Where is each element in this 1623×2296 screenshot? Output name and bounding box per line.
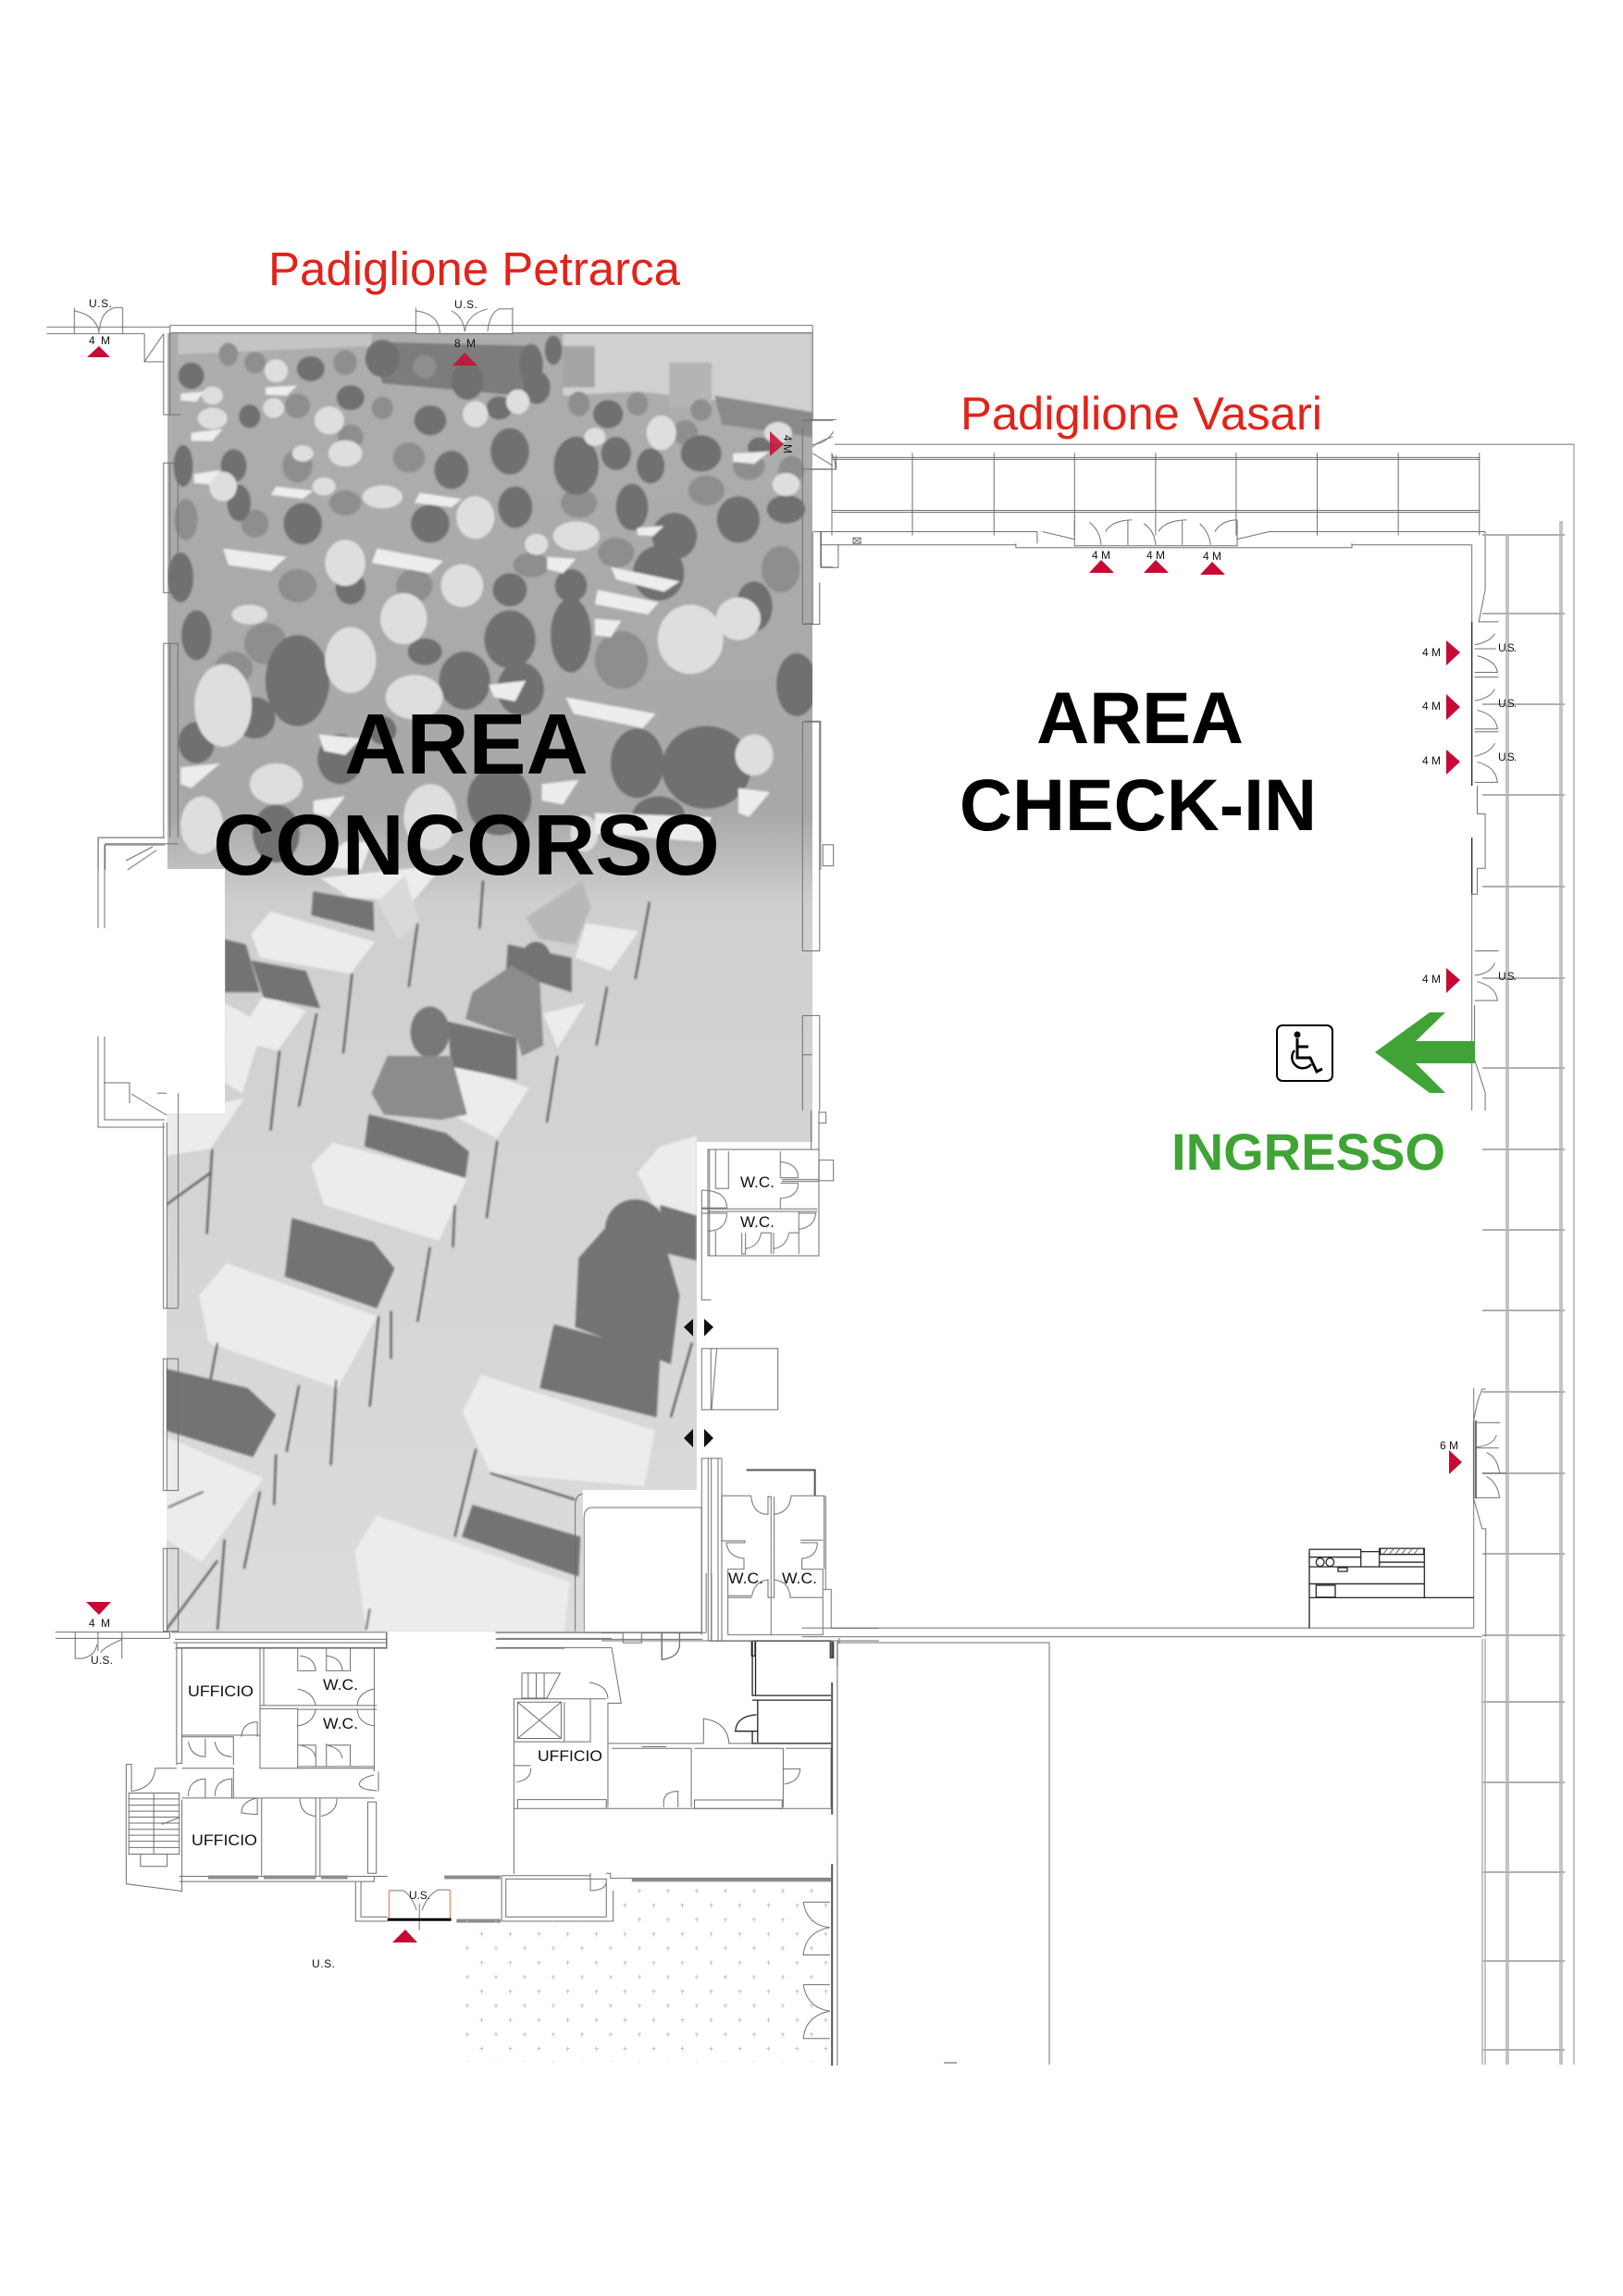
- room labels: [188, 1173, 817, 1849]
- room labels: W.C.: [740, 1213, 774, 1231]
- exit markers: east wall: 4 M: [1422, 973, 1441, 986]
- exit markers: east wall: U.S.: [1498, 970, 1517, 983]
- icon: wheelchair access: [1277, 1025, 1332, 1081]
- room labels: UFFICIO: [192, 1831, 257, 1849]
- exit markers: east wall: 4 M: [1422, 700, 1441, 713]
- heading: Padiglione Petrarca: Padiglione Petrarca: [268, 242, 681, 295]
- floor plan: 6 M door and kitchen block: [802, 1388, 1506, 1637]
- exit markers: top corridor: 4 M: [1146, 549, 1165, 562]
- floor plan: Padiglione Petrarca perimeter: [47, 307, 833, 870]
- exit markers: south west: U.S.: [312, 1957, 335, 1970]
- room labels: UFFICIO: [188, 1682, 254, 1700]
- exit markers: Petrarca pavilion: [87, 297, 794, 456]
- room labels: W.C.: [782, 1570, 817, 1587]
- arrow: entrance: [1375, 1012, 1475, 1093]
- passage arrows between halls: [684, 1319, 713, 1447]
- exit markers: east wall: U.S.: [1498, 697, 1517, 710]
- floor plan: lower office wing: [56, 1573, 888, 2066]
- photo: crowded upper rows: [167, 334, 817, 870]
- exit markers: top corridor: 4 M: [1092, 549, 1110, 562]
- exit markers: south west: [86, 1602, 430, 1970]
- floor plan: central toilets and service rooms: [601, 1111, 879, 1666]
- exam hall photograph: [157, 324, 824, 1638]
- heading: Padiglione Vasari: Padiglione Vasari: [960, 388, 1322, 440]
- room labels: W.C.: [740, 1173, 774, 1191]
- floor plan: south building outer lines: [837, 1638, 1049, 2065]
- floor plan: left wall windows: [157, 1093, 702, 1648]
- exit markers: south west: U.S.: [409, 1889, 430, 1902]
- label: INGRESSO: INGRESSO: [1171, 1123, 1445, 1181]
- courtyard dot pattern: [465, 1889, 831, 2062]
- exit markers: Petrarca pavilion: 4 M: [89, 334, 110, 347]
- exit markers: east wall: 4 M: [1422, 646, 1441, 659]
- exit markers: top corridor: 4 M: [1203, 550, 1221, 563]
- label: AREA CONCORSO: AREA: [344, 696, 588, 792]
- exit markers: Petrarca pavilion: U.S.: [454, 298, 477, 311]
- exit markers: south west: 4 M: [89, 1617, 110, 1630]
- exit markers: Petrarca pavilion: 4 M: [781, 435, 794, 453]
- exit markers: east wall: 6 M: [1440, 1439, 1458, 1452]
- room labels: W.C.: [323, 1676, 358, 1694]
- exit markers: top corridor: [1089, 549, 1225, 575]
- room labels: W.C.: [728, 1570, 763, 1587]
- label: AREA CONCORSO: CONCORSO: [213, 797, 720, 893]
- room labels: W.C.: [323, 1715, 358, 1732]
- label: AREA CHECK-IN: CHECK-IN: [960, 763, 1317, 846]
- photo: front rows of desks and chairs: [157, 864, 697, 1632]
- exit markers: Petrarca pavilion: 8 M: [454, 337, 476, 350]
- label: AREA CHECK-IN: AREA: [1036, 676, 1244, 759]
- exit markers: east wall: 4 M: [1422, 754, 1441, 767]
- exit markers: Petrarca pavilion: U.S.: [89, 297, 112, 310]
- floor plan: right side colonnade: [1482, 444, 1574, 2065]
- exit markers: south west: U.S.: [91, 1654, 113, 1667]
- exit markers: east wall: U.S.: [1498, 751, 1517, 763]
- floor plan: left side recesses: [98, 838, 167, 1127]
- floor plan: Padiglione Vasari top corridor and doors: [802, 420, 1574, 1111]
- exit markers: east wall: [1422, 640, 1517, 1474]
- exit markers: east wall: U.S.: [1498, 641, 1517, 654]
- room labels: UFFICIO: [538, 1747, 602, 1765]
